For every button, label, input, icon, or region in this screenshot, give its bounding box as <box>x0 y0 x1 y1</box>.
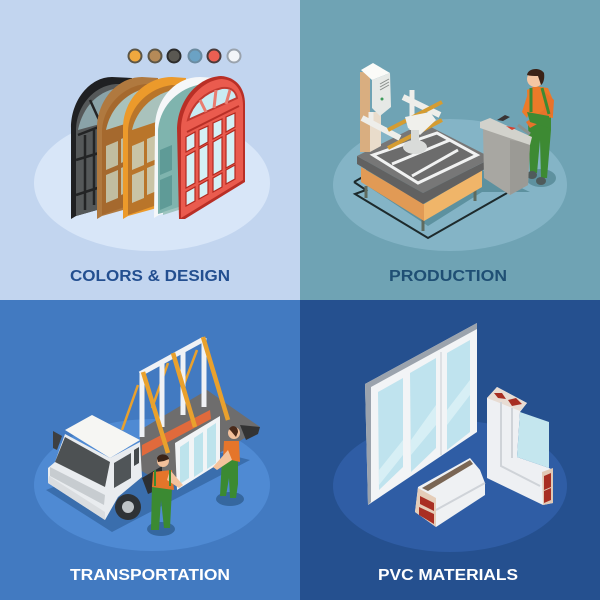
worker <box>522 69 556 187</box>
glass window unit <box>175 416 220 490</box>
corner window profile <box>487 387 553 505</box>
gantry with yellow rails <box>362 90 442 154</box>
control desk <box>480 115 532 195</box>
truck cab <box>48 415 162 520</box>
colour swatches <box>128 50 240 62</box>
panel: PVC materials <box>300 300 600 600</box>
back straps <box>122 350 197 430</box>
bottom frame profile <box>415 458 485 527</box>
machine legs <box>366 186 475 231</box>
window frames on truck <box>140 338 204 437</box>
window glass panes <box>378 340 470 490</box>
panel: production <box>300 0 600 300</box>
orange lifting straps <box>143 337 228 453</box>
machine shadow <box>366 160 530 226</box>
machine table top <box>357 156 492 204</box>
white frame on table <box>373 133 477 183</box>
heading: production: PRODUCTION <box>389 268 507 285</box>
orange arched window <box>123 77 186 219</box>
machine orange base <box>361 167 424 221</box>
heading: colors and design: COLORS & DESIGN <box>70 268 230 285</box>
brown arched window <box>97 77 158 219</box>
worker left <box>147 454 183 536</box>
panel: transportation <box>0 300 300 600</box>
worker right <box>213 426 244 506</box>
truck flatbed <box>140 390 260 485</box>
red window panes <box>186 113 235 206</box>
large sliding window <box>365 323 477 505</box>
red arched window <box>177 76 245 219</box>
orange cargo beam <box>142 410 211 456</box>
column and control cabinet <box>360 63 391 152</box>
floor mat outline <box>354 174 507 238</box>
heading: transportation: TRANSPORTATION <box>70 567 230 584</box>
white arched window <box>154 77 216 218</box>
panel: colors and design <box>0 0 300 300</box>
truck ground shadow <box>46 440 250 532</box>
black arched window <box>71 77 132 219</box>
heading: PVC materials: PVC MATERIALS <box>378 567 518 584</box>
